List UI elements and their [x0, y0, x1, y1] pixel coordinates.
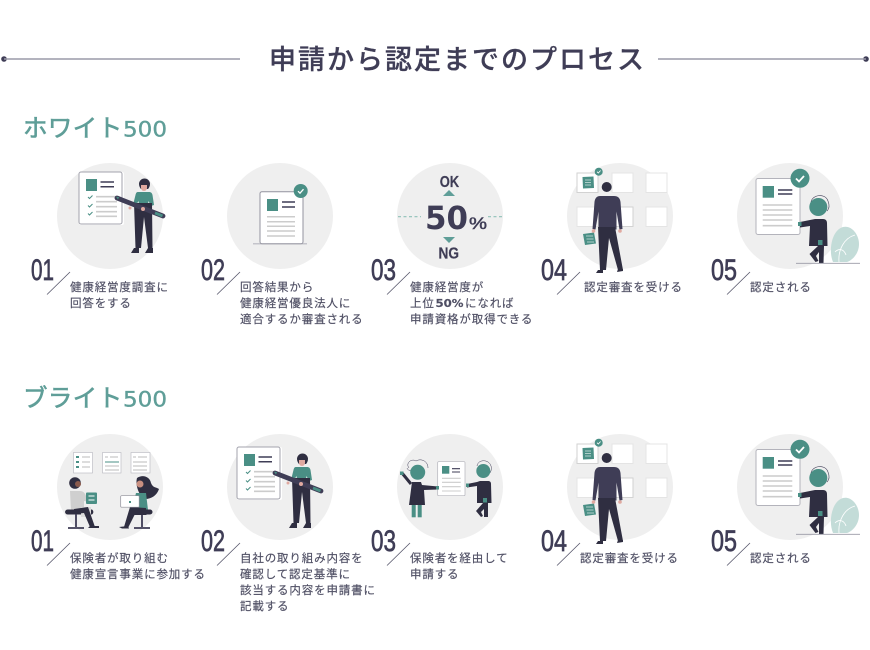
description: 認定審査を受ける [584, 280, 683, 294]
icon: 50 percent threshold: % [469, 214, 487, 233]
heading: bright 500 [23, 384, 167, 412]
description: 認定審査を受ける [580, 551, 679, 565]
description: 認定される [750, 281, 812, 294]
number 03: 03 [371, 525, 396, 558]
icon: certified person [756, 169, 860, 263]
step: bright 01 [31, 434, 206, 581]
step: white 04 [541, 163, 683, 294]
description: 適合するか審査される [240, 312, 364, 326]
number 01: 01 [31, 525, 54, 558]
heading: white 500: 500 [123, 118, 167, 142]
icon: certified person [756, 440, 860, 534]
description: 保険者を経由して [410, 551, 508, 565]
number 05: 05 [711, 525, 737, 558]
step: bright 05 [711, 434, 860, 566]
number 02: 02 [201, 525, 225, 558]
icon: 50 percent threshold: 50 [425, 199, 468, 237]
description: 50% [436, 298, 464, 310]
step: bright 02 [201, 434, 376, 613]
icon: man reviewing boards [577, 168, 667, 273]
icon: checked document [253, 184, 308, 244]
step: white 03 [371, 163, 533, 326]
step: white 05 [711, 163, 860, 294]
heading: bright 500: 500 [123, 388, 167, 412]
icon: 50 percent threshold: NG [438, 246, 459, 262]
step: bright 03 [371, 434, 508, 581]
icon: woman with checklist [237, 447, 321, 528]
description: 健康経営度が [410, 280, 484, 294]
title rule left [1, 56, 240, 62]
heading: bright 500: ブライト [23, 384, 123, 412]
number 04: 04 [541, 254, 567, 287]
description: 確認して認定基準に [240, 567, 351, 581]
heading: white 500: ホワイト [23, 116, 123, 142]
number 01: 01 [31, 254, 54, 287]
heading: white 500 [23, 116, 167, 142]
step: bright 04 [541, 434, 679, 566]
description: 該当する内容を申請書に [240, 583, 376, 597]
description: 回答をする [70, 296, 132, 310]
number 05: 05 [711, 254, 737, 287]
icon: people submitting application [400, 460, 492, 517]
number 03: 03 [371, 254, 396, 287]
step: white 01 [31, 163, 169, 310]
icon: man reviewing boards [577, 439, 667, 544]
description: 健康経営度調査に [70, 280, 169, 294]
description: 健康経営優良法人に [240, 296, 351, 310]
icon: two people at workshop [65, 452, 159, 528]
description: 回答結果から [240, 280, 314, 294]
description: 申請する [410, 568, 459, 581]
description: 保険者が取り組む [70, 551, 169, 565]
description: 健康宣言事業に参加する [70, 567, 206, 581]
description: になれば [465, 297, 514, 310]
title: 申請から認定までのプロセス [269, 45, 646, 75]
number 04: 04 [541, 525, 567, 558]
number 02: 02 [201, 254, 225, 287]
description: 認定される [750, 552, 812, 565]
description: 申請資格が取得できる [410, 312, 533, 326]
description: 自社の取り組み内容を [240, 551, 364, 565]
icon: 50 percent threshold: OK [440, 174, 460, 191]
title rule right [658, 56, 869, 62]
step: white 02 [201, 163, 364, 326]
icon: woman with checklist [79, 172, 163, 253]
description: 記載する [240, 600, 289, 613]
description: 上位 [410, 297, 435, 310]
icon: 50 percent threshold [398, 174, 503, 262]
